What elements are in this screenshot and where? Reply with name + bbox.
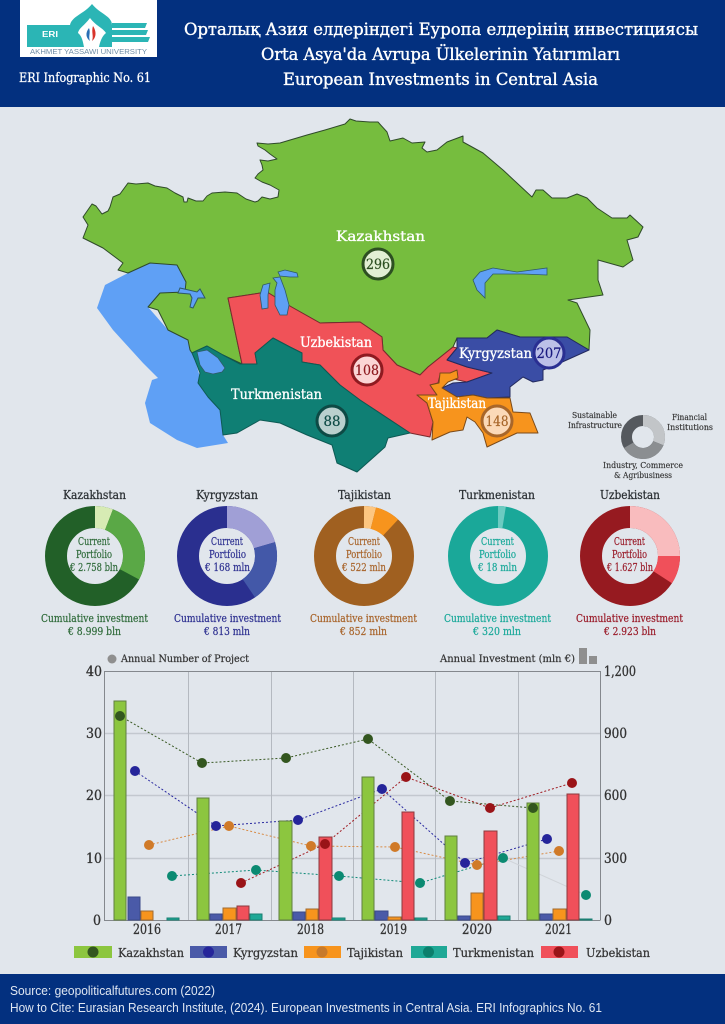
badge: Tajikistan 148: 148 <box>486 414 508 430</box>
badge: Tajikistan 148 <box>482 406 512 436</box>
panel: Kazakhstan portfolio donut: Cumulative investment <box>41 612 148 625</box>
year labels: 2017 <box>215 922 242 938</box>
year labels: 2021 <box>545 922 572 938</box>
sector legend donut <box>568 411 713 480</box>
Caspian Sea <box>97 263 228 448</box>
year labels: 2016 <box>133 922 161 938</box>
panel: Tajikistan portfolio donut: € 522 mln <box>341 561 387 574</box>
map labels: Kazakhstan <box>336 229 425 245</box>
source and citation: How to Cite: Eurasian Research Institute, (2024). European Investments in Central Asia. ERI Infographics No. 61 <box>10 1001 602 1015</box>
panel: Uzbekistan portfolio donut: Cumulative investment <box>576 612 683 625</box>
sector legend donut: Financial <box>672 413 708 422</box>
infographic number: ERI Infographic No. 61 <box>19 71 151 86</box>
bars: Turkmenistan <box>167 914 592 920</box>
title: Orta Asya'da Avrupa Ülkelerinin Yatırımları <box>261 44 620 64</box>
map labels: Kyrgyzstan <box>459 346 532 362</box>
Lake Balkhash <box>473 268 547 298</box>
bars: Tajikistan <box>141 893 566 920</box>
panel: Kyrgyzstan portfolio donut: € 813 mln <box>203 625 251 638</box>
badge: Uzbekistan 108 <box>352 355 382 385</box>
right axis labels: 600 <box>604 788 627 804</box>
badge: Turkmenistan 88 <box>317 406 347 436</box>
panel: Turkmenistan portfolio donut: Current <box>481 535 514 548</box>
left axis labels: 40 <box>86 664 102 680</box>
logo <box>20 0 157 57</box>
left axis labels: 30 <box>86 726 102 742</box>
left axis labels <box>86 664 102 929</box>
chart key: Annual Investment (mln €) <box>439 653 575 665</box>
badge: Kyrgyzstan 207: 207 <box>536 346 562 362</box>
Caspian inlet <box>178 288 205 308</box>
bars: Kazakhstan <box>114 701 539 920</box>
logo: ERI <box>42 30 58 39</box>
panel: Kyrgyzstan portfolio donut: Kyrgyzstan <box>196 487 258 502</box>
dots: Kyrgyzstan <box>130 766 552 868</box>
panel: Kyrgyzstan portfolio donut: Cumulative investment <box>174 612 281 625</box>
panel: Kyrgyzstan portfolio donut <box>174 487 281 638</box>
panel: Uzbekistan portfolio donut: € 2.923 bln <box>603 625 657 638</box>
map labels: Tajikistan <box>428 396 486 412</box>
panel: Turkmenistan portfolio donut: € 18 mln <box>477 561 518 574</box>
panel: Kyrgyzstan portfolio donut: € 168 mln <box>204 561 251 574</box>
panel: Kazakhstan portfolio donut: Kazakhstan <box>63 487 126 502</box>
panel: Tajikistan portfolio donut: Tajikistan <box>338 487 391 502</box>
dots: Uzbekistan <box>236 772 577 888</box>
panel: Turkmenistan portfolio donut: € 320 mln <box>472 625 522 638</box>
panel: Kazakhstan portfolio donut: € 2.758 bln <box>69 561 119 574</box>
country legend: Turkmenistan <box>453 945 534 960</box>
Turkmenistan <box>192 338 410 472</box>
panel: Tajikistan portfolio donut: Cumulative investment <box>310 612 417 625</box>
country legend: Uzbekistan <box>586 945 650 960</box>
panel: Turkmenistan portfolio donut <box>444 487 551 638</box>
year labels: 2018 <box>297 922 324 938</box>
title <box>184 20 698 89</box>
panel: Turkmenistan portfolio donut: Portfolio <box>479 548 516 561</box>
map labels <box>231 229 532 412</box>
Kazakhstan <box>83 119 643 375</box>
year labels: 2020 <box>462 922 492 938</box>
dots: Kazakhstan <box>115 711 538 813</box>
panel: Tajikistan portfolio donut: Current <box>348 535 380 548</box>
badge: Uzbekistan 108: 108 <box>355 363 379 379</box>
dots: Turkmenistan <box>167 853 591 900</box>
panel: Uzbekistan portfolio donut: Current <box>614 535 645 548</box>
panel: Turkmenistan portfolio donut: Turkmenistan <box>459 487 535 502</box>
left axis labels: 0 <box>93 913 101 929</box>
header band <box>0 0 725 107</box>
title: Орталық Азия елдеріндегі Еуропа елдерінің инвестициясы <box>184 20 698 39</box>
panel: Uzbekistan portfolio donut: € 1.627 bln <box>606 561 653 574</box>
left axis labels: 20 <box>86 788 102 804</box>
sector legend donut: Industry, Commerce <box>603 461 683 470</box>
badge: Kazakhstan 296: 296 <box>366 257 390 273</box>
panel: Kazakhstan portfolio donut: Current <box>78 535 110 548</box>
Aral Sea <box>260 270 298 315</box>
panel: Tajikistan portfolio donut: € 852 mln <box>339 625 388 638</box>
panel: Kazakhstan portfolio donut <box>41 487 148 638</box>
country legend: Tajikistan <box>347 945 403 960</box>
trend lines <box>120 716 572 883</box>
sector legend donut: Infrastructure <box>568 421 622 430</box>
bars: Uzbekistan <box>237 794 579 920</box>
dots: Tajikistan <box>144 821 564 870</box>
panel: Kazakhstan portfolio donut: € 8.999 bln <box>67 625 122 638</box>
right axis labels: 900 <box>604 726 627 742</box>
map labels: Uzbekistan <box>300 335 372 351</box>
badge: Kazakhstan 296 <box>363 249 393 279</box>
right axis labels: 0 <box>604 913 612 929</box>
left axis labels: 10 <box>86 851 102 867</box>
panel: Kyrgyzstan portfolio donut: Portfolio <box>209 548 246 561</box>
country legend: Kazakhstan <box>118 945 184 960</box>
source and citation: Source: geopoliticalfutures.com (2022) <box>10 984 215 998</box>
panel: Tajikistan portfolio donut: Portfolio <box>346 548 382 561</box>
panel: Uzbekistan portfolio donut <box>576 487 683 638</box>
year labels: 2019 <box>380 922 407 938</box>
Tajikistan <box>417 370 538 447</box>
sector legend donut: Institutions <box>667 423 713 432</box>
year labels <box>133 922 572 938</box>
footer band <box>0 974 725 1024</box>
sector legend donut: Sustainable <box>572 411 617 420</box>
panel: Turkmenistan portfolio donut: Cumulative investment <box>444 612 551 625</box>
panel: Uzbekistan portfolio donut: Uzbekistan <box>600 487 660 502</box>
badge: Turkmenistan 88: 88 <box>324 414 340 430</box>
country legend: Kyrgyzstan <box>233 945 298 960</box>
sector legend donut: & Agribusiness <box>614 471 672 480</box>
panel: Uzbekistan portfolio donut: Portfolio <box>612 548 647 561</box>
title: European Investments in Central Asia <box>283 70 598 89</box>
chart key <box>108 648 597 665</box>
chart key: Annual Number of Project <box>120 653 249 665</box>
map of Central Asia <box>83 119 643 472</box>
right axis labels: 1,200 <box>604 664 636 680</box>
Uzbekistan <box>228 292 492 437</box>
panel: Kazakhstan portfolio donut: Portfolio <box>76 548 112 561</box>
bars: Kyrgyzstan <box>128 897 553 920</box>
panel: Kyrgyzstan portfolio donut: Current <box>211 535 243 548</box>
combined chart: annual investment bars and project count dots <box>86 648 636 938</box>
Kyrgyzstan <box>442 330 589 398</box>
country legend <box>74 945 650 960</box>
right axis labels <box>604 664 636 929</box>
logo: AKHMET YASSAWI UNIVERSITY <box>30 47 147 56</box>
map labels: Turkmenistan <box>231 387 322 403</box>
Garabogaz lake <box>197 350 225 374</box>
badge: Kyrgyzstan 207 <box>534 338 564 368</box>
source and citation <box>10 984 602 1015</box>
right axis labels: 300 <box>604 851 627 867</box>
panel: Tajikistan portfolio donut <box>310 487 417 638</box>
